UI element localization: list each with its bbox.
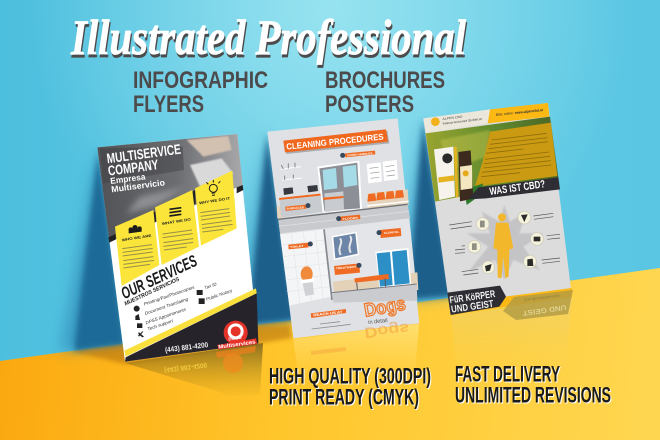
feature text: quality xyxy=(269,364,432,410)
poster 3 section band xyxy=(468,177,560,199)
poster 1 logo: Multiservices xyxy=(218,340,256,351)
poster 2 footer: REACH US AT xyxy=(313,310,344,317)
poster 3 social handle: @originalalpencbd xyxy=(524,294,560,302)
feature text: quality: HIGH QUALITY (300DPI) xyxy=(270,364,432,390)
poster 3 header: Bitte online: www.alpencbd.at xyxy=(496,108,544,117)
poster 1 logo: DOGO xyxy=(228,335,243,342)
subheading: left column xyxy=(133,67,268,118)
poster 2 toilet room xyxy=(280,229,331,306)
poster 2 callout labels: FLOORS xyxy=(342,216,358,221)
poster 2 callout labels: CLINICAL xyxy=(384,230,400,235)
subheading: right column: POSTERS xyxy=(325,91,414,118)
title: Illustrated Professional xyxy=(70,9,466,65)
poster 3 slogan tab: FüR KöRPER xyxy=(449,289,496,306)
poster shadows xyxy=(60,120,455,364)
subheading: left column: INFOGRAPHIC xyxy=(133,67,268,94)
poster 1 service list: Document Translating xyxy=(144,296,189,316)
subheading: left column: FLYERS xyxy=(133,91,204,118)
reflection: poster 1 xyxy=(125,343,263,396)
poster 2: cleaning procedures xyxy=(267,118,419,338)
feature text: quality: PRINT READY (CMYK) xyxy=(269,384,419,410)
poster 3 header: ALPEN CBD xyxy=(442,114,464,121)
poster 3 slogan tab: UND GEIST xyxy=(451,299,494,316)
poster 1 logo xyxy=(217,321,257,351)
panel: who we are xyxy=(115,210,159,286)
poster 1 service list: Tech support xyxy=(147,318,174,332)
subheading: right column xyxy=(325,67,445,118)
poster 2 footer: in detail xyxy=(368,318,388,326)
panel: what we do: WHAT WE DO xyxy=(162,217,191,226)
poster 3 header xyxy=(423,103,549,133)
poster 3 header: Naturextrakt Edition xyxy=(442,117,483,126)
poster 1: multiservice flyer xyxy=(97,134,258,362)
poster 1 heading text: Multiservicio xyxy=(111,177,165,194)
poster 1 service list: DPSS Appointments xyxy=(145,306,188,325)
poster 2 callout labels: TOILET xyxy=(290,244,305,249)
poster 1 services heading xyxy=(118,251,200,307)
poster 1 dark footer xyxy=(125,293,258,362)
poster 1 heading text: MULTISERVICE xyxy=(106,141,182,166)
title: Illustrated Professional xyxy=(71,12,467,68)
poster 2 callout labels xyxy=(285,151,401,275)
poster 3 cannabis photo xyxy=(426,117,558,205)
poster 1 phone number: (443) 881-4200 xyxy=(164,340,209,354)
panel: why we do it: WHY WE DO IT xyxy=(199,196,231,205)
poster 3 slogan tab xyxy=(447,286,506,316)
poster 2 title banner: CLEANING PROCEDURES xyxy=(286,131,384,152)
poster 1 heading text: Empresa xyxy=(110,171,146,186)
poster 1 service list: Printing/Fax/Photocopies xyxy=(143,284,196,307)
poster 3 product xyxy=(434,147,473,201)
poster 2 corridor floor xyxy=(278,204,410,233)
poster 2 callout labels: TREATMENT xyxy=(336,265,357,270)
poster 1 services heading: OUR SERVICES xyxy=(118,251,200,303)
reflection: poster 3 xyxy=(451,290,573,375)
poster 2 treatment room xyxy=(324,218,418,303)
poster 2 callout labels: DOOR HANDLES xyxy=(347,151,373,157)
poster 3: was ist cbd xyxy=(423,103,572,316)
panel: what we do xyxy=(155,190,199,265)
poster 3 section band: WAS IST CBD? xyxy=(489,178,546,198)
feature text: quality: PRINT READY (CMYK) xyxy=(270,386,420,410)
feature text: delivery: FAST DELIVERY xyxy=(456,362,561,388)
reflection: poster 1: (443) 881-4200 xyxy=(164,361,207,373)
poster 2 callout labels: SURFACES xyxy=(286,205,304,211)
poster 1 service list: Tax ID xyxy=(204,281,217,290)
poster 1 services heading: MUESTROS SERVICIOS xyxy=(124,277,181,307)
poster 2 footer xyxy=(311,293,407,329)
poster 1 heading text: COMPANY xyxy=(107,156,160,179)
poster 1 service list: Public Notary xyxy=(205,288,234,302)
panel: why we do it xyxy=(195,171,237,246)
poster 2 footer: Dogs xyxy=(362,293,407,321)
feature text: quality: HIGH QUALITY (300DPI) xyxy=(269,364,431,388)
poster 3 body diagram xyxy=(449,205,560,280)
reflection: poster 2 xyxy=(293,319,419,385)
panel: who we are: WHO WE ARE xyxy=(122,234,152,242)
feature text: delivery: FAST DELIVERY xyxy=(455,362,560,386)
subheading: right column: BROCHURES xyxy=(325,67,445,94)
poster 1 photo header xyxy=(97,134,243,243)
reflection: poster 2: Dogs xyxy=(364,319,410,341)
poster 1 yellow stripe xyxy=(124,288,257,357)
poster 1 service list xyxy=(134,281,234,337)
poster 1 heading text xyxy=(106,141,182,194)
floor xyxy=(0,268,660,440)
poster 3 yellow footer xyxy=(451,288,572,315)
poster 2 reception room xyxy=(277,160,409,218)
reflection: poster 3: UND GEIST xyxy=(521,303,567,316)
feature text: delivery xyxy=(455,362,612,408)
